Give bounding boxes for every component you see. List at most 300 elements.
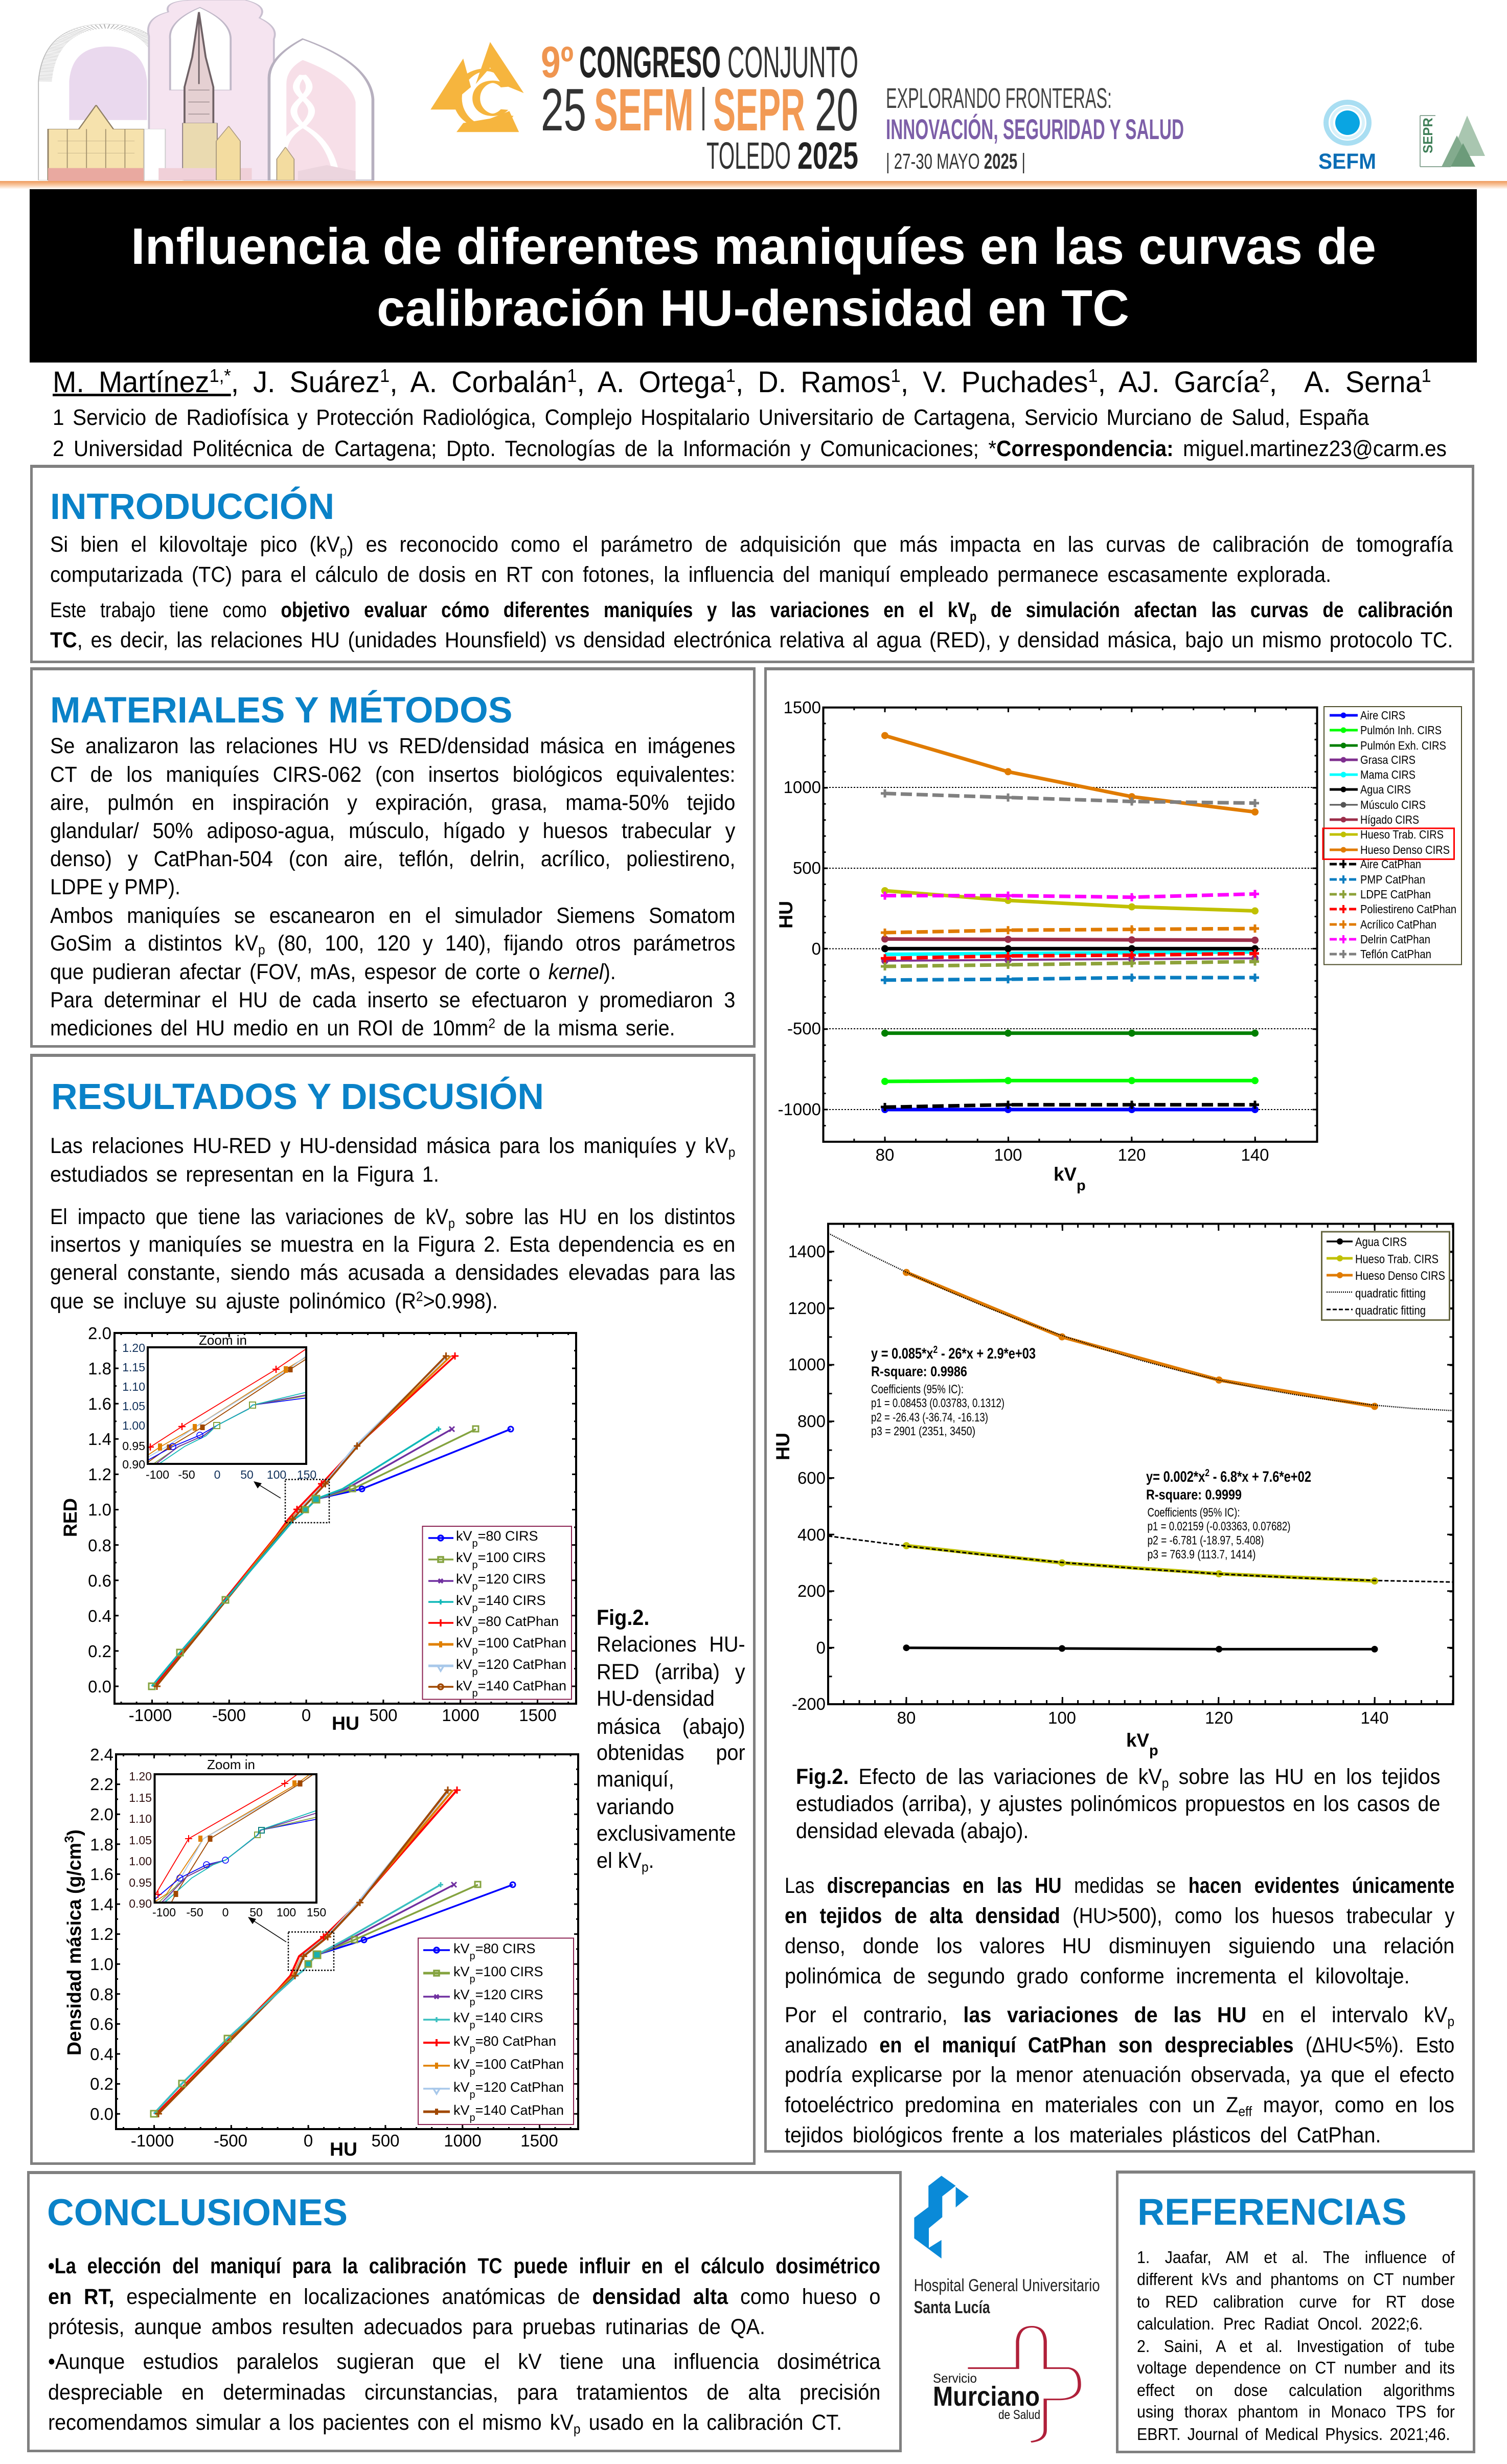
- text block: referencias: to RED calibration curve for RT dose: [1137, 2292, 1455, 2311]
- text block: resultados: Las relaciones HU-RED y HU-densidad másica para los maniquíes y kVp: [50, 1134, 735, 1160]
- axis labels: kV: [1054, 1164, 1077, 1185]
- panel: materiales y métodos: [30, 667, 756, 1048]
- tick labels: 0.8: [90, 1985, 113, 2004]
- legend: p: [470, 2112, 475, 2123]
- heading: materiales y métodos: MATERIALES Y MÉTODOS: [50, 690, 512, 731]
- title: [30, 189, 1477, 363]
- legend: inserts: Aire CatPhan: [1360, 857, 1421, 871]
- text block: conclusiones: en RT, especialmente en localizaciones anatómicas de densidad alta como hueso o: [48, 2285, 880, 2309]
- legend: p: [470, 2089, 475, 2100]
- zoom selection box and arrow: [254, 1480, 329, 1523]
- text block: conclusiones: prótesis, aunque ambos resulten adecuados para pruebas rutinarias de QA.: [48, 2315, 765, 2339]
- inset: zoom in: -100: [146, 1468, 169, 1481]
- annotation: trabecular bone fit: p3 = 763.9 (113.7, 1414): [1147, 1548, 1255, 1562]
- chart: RED vs HU: 1500: [519, 1706, 557, 1725]
- legend: kV: [453, 2010, 470, 2025]
- icon: Hospital Santa Lucía mark: [914, 2176, 969, 2258]
- tick labels: 0.8: [88, 1536, 111, 1555]
- caption: Fig.2 right: estudiados (arriba), y ajustes polinómicos propuestos en los casos de: [796, 1792, 1440, 1816]
- inset: zoom in: 0.95: [122, 1439, 145, 1453]
- icon: Servicio Murciano de Salud cross: [968, 2327, 1080, 2442]
- legend: fits: [1322, 1232, 1450, 1320]
- text block: discussion: polinómica de segundo grado conforme incrementa el kilovoltaje.: [785, 1964, 1410, 1988]
- legend: inserts: LDPE CatPhan: [1360, 888, 1431, 901]
- legend: p: [470, 1997, 475, 2008]
- legend: kV: [453, 2079, 470, 2095]
- legend: fits: quadratic fitting: [1355, 1304, 1426, 1318]
- tick labels: 0: [812, 939, 821, 958]
- text block: resultados: El impacto que tiene las variaciones de kVp sobre las HU en los distintos: [50, 1205, 735, 1231]
- tick labels: 600: [797, 1468, 826, 1487]
- legend: kV: [456, 1528, 472, 1544]
- congress title text: SEPR: [713, 76, 805, 143]
- text block: discussion: tejidos biológicos frente a los materiales plásticos del CatPhan.: [785, 2123, 1381, 2147]
- chart: RED vs HU: [60, 1324, 577, 1734]
- text block: referencias: 1. Jaafar, AM et al. The influence of: [1137, 2248, 1455, 2267]
- chart: quadratic fits: 80: [897, 1708, 916, 1727]
- axis labels: [60, 1498, 359, 1734]
- caption: Fig.2 left: Fig.2.: [597, 1606, 649, 1630]
- text block: materiales y métodos: CT de los maniquíes CIRS-062 (con insertos biológicos equivalentes:: [50, 762, 735, 787]
- tick labels: [778, 698, 821, 1119]
- tick labels: 0: [816, 1638, 826, 1657]
- congress title text: 25: [541, 76, 586, 143]
- chart: RED vs HU: -500: [212, 1706, 246, 1725]
- legend: inserts: Agua CIRS: [1360, 783, 1411, 796]
- chart: HU vs kVp by insert: 100: [994, 1145, 1022, 1164]
- legend: inserts: Delrin CatPhan: [1360, 933, 1430, 946]
- annotation: dense bone fit: p2 = -26.43 (-36.74, -16.13): [871, 1411, 988, 1425]
- series: water: [906, 1648, 1375, 1649]
- inset: zoom in: 0.95: [129, 1876, 152, 1889]
- health service name: de Salud: [998, 2408, 1040, 2422]
- axis labels: [772, 1433, 1158, 1759]
- health service name: Servicio: [933, 2371, 977, 2386]
- tick labels: 1000: [784, 778, 821, 797]
- legend: inserts: Aire CIRS: [1360, 709, 1405, 722]
- text block: materiales y métodos: aire, pulmón en inspiración y expiración, grasa, mama-50% tejido: [50, 790, 735, 815]
- inset: zoom in: -50: [186, 1906, 203, 1919]
- legend: =80 CIRS: [478, 1528, 538, 1544]
- tick labels: [88, 1324, 111, 1696]
- legend: =140 CIRS: [475, 2010, 543, 2025]
- text block: referencias: 2. Saini, A et al. Investigation of tube: [1137, 2337, 1455, 2356]
- legend: inserts: Pulmón Inh. CIRS: [1360, 724, 1442, 737]
- inset: zoom in: [122, 1332, 316, 1481]
- title: calibración HU-densidad en TC: [377, 280, 1129, 337]
- decorative band: [0, 181, 1507, 189]
- congress title text: 20: [815, 76, 858, 143]
- caption: Fig.2 left: variando: [597, 1795, 674, 1819]
- congress slogan: [886, 82, 1184, 174]
- legend: kV: [456, 1571, 472, 1587]
- tick labels: 2.0: [90, 1805, 113, 1824]
- axis labels: p: [1149, 1743, 1158, 1759]
- icon: congress logo triangle: [430, 42, 524, 132]
- text block: introducción: TC, es decir, las relaciones HU (unidades Hounsfield) vs densidad electrónica relativa al agua (RED), y densidad másica, bajo un mismo protocolo TC.: [50, 628, 1453, 652]
- axis labels: Densidad másica (g/cm: [64, 1840, 85, 2055]
- chart: quadratic fits: [772, 1223, 1454, 1759]
- legend: fits: quadratic fitting: [1355, 1286, 1426, 1301]
- congress slogan: EXPLORANDO FRONTERAS:: [886, 82, 1112, 114]
- annotation: trabecular bone fit: y= 0.002*x: [1146, 1468, 1221, 1485]
- inset: zoom in: 0: [222, 1906, 229, 1919]
- legend: kV: [456, 1550, 472, 1565]
- annotation: dense bone fit: p3 = 2901 (2351, 3450): [871, 1425, 975, 1438]
- tick labels: 0.4: [88, 1607, 111, 1625]
- text block: discussion: Las discrepancias en las HU medidas se hacen evidentes únicamente: [785, 1873, 1454, 1898]
- illustration: Toledo monuments: [38, 0, 373, 182]
- tick labels: 2.2: [90, 1775, 113, 1794]
- inset: zoom in: [129, 1757, 326, 1919]
- header banner: congress logos: [0, 0, 1507, 189]
- tick labels: 0.2: [88, 1642, 111, 1661]
- tick labels: 1.0: [90, 1955, 113, 1974]
- inset: zoom in: -50: [178, 1468, 195, 1481]
- congress title text: 9º: [541, 38, 574, 87]
- legend: inserts: Hígado CIRS: [1360, 813, 1419, 826]
- inset: zoom in: 100: [267, 1468, 286, 1481]
- caption: Fig.2 left: HU-densidad: [597, 1686, 715, 1711]
- curves: CatPhan: [154, 1356, 455, 1686]
- inset: zoom in: 100: [277, 1906, 296, 1919]
- tick labels: 1.8: [88, 1359, 111, 1378]
- legend: kV: [456, 1678, 472, 1693]
- y axis ticks: [115, 1332, 576, 1704]
- health service name: Murciano: [933, 2381, 1040, 2412]
- text block: discussion: podría explicarse por la menor atenuación observada, ya que el efecto: [785, 2063, 1454, 2087]
- legend: fits: Hueso Trab. CIRS: [1355, 1253, 1438, 1266]
- caption: Fig.2 right: [796, 1765, 1440, 1844]
- legend: p: [472, 1538, 478, 1549]
- legend: =120 CIRS: [478, 1571, 545, 1587]
- legend: [418, 1938, 574, 2124]
- caption: Fig.2 left: RED (arriba) y: [597, 1660, 745, 1684]
- affiliation 2 and correspondence: 2 Universidad Politécnica de Cartagena; Dpto. Tecnologías de la Información y Comunicaciones; *Correspondencia: miguel.martinez23@carm.es: [53, 436, 1447, 461]
- chart: RED vs HU: -1000: [129, 1706, 172, 1725]
- series: dense bone with fit: [828, 1233, 1453, 1411]
- inset: zoom in: 1.00: [122, 1419, 145, 1432]
- logo: SEFM: [1318, 102, 1376, 174]
- legend: =100 CatPhan: [475, 2056, 564, 2072]
- legend: p: [470, 1974, 475, 1985]
- legend: p: [472, 1581, 478, 1592]
- legend: fits: Hueso Denso CIRS: [1355, 1269, 1445, 1283]
- congress slogan: INNOVACIÓN, SEGURIDAD Y SALUD: [886, 113, 1184, 145]
- axes and ticks: [823, 707, 1317, 1142]
- markers: [149, 1352, 513, 1690]
- chart: HU vs kVp by insert: [775, 698, 1462, 1194]
- text block: discussion: en tejidos de alta densidad (HU>500), como los huesos trabecular y: [785, 1904, 1454, 1928]
- hospital name: Santa Lucía: [914, 2298, 990, 2317]
- annotation: trabecular bone fit: - 6.8*x + 7.6*e+02: [1209, 1468, 1311, 1485]
- tick labels: 1.6: [90, 1865, 113, 1884]
- congress title text: CONGRESO: [579, 38, 721, 87]
- text block: referencias: calculation. Prec Radiat Oncol. 2022;6.: [1137, 2314, 1423, 2333]
- legend: p: [472, 1645, 478, 1656]
- tick labels: 400: [797, 1525, 826, 1544]
- legend: kV: [456, 1657, 472, 1672]
- caption: Fig.2 left: Relaciones HU-: [597, 1632, 745, 1657]
- text block: introducción: Si bien el kilovoltaje pico (kVp) es reconocido como el parámetro de adquisición que más impacta en las curvas de calibración de tomografía: [50, 532, 1453, 558]
- chart: quadratic fits: 120: [1205, 1708, 1233, 1727]
- logo: SEPR: SEPR: [1420, 118, 1435, 153]
- text block: referencias: using thorax phantom in Monaco TPS for: [1137, 2402, 1455, 2421]
- legend: kV: [456, 1593, 472, 1608]
- legend: inserts: Teflón CatPhan: [1360, 947, 1431, 961]
- text block: materiales y métodos: GoSim a distintos kVp (80, 100, 120 y 140), fijando otros parámetros: [50, 931, 735, 957]
- text block: materiales y métodos: Ambos maniquíes se escanearon en el simulador Siemens Somatom: [50, 903, 735, 928]
- inset: zoom in: 1.00: [129, 1855, 152, 1868]
- text block: referencias: voltage dependence on CT number and its: [1137, 2358, 1455, 2377]
- legend: inserts: Acrílico CatPhan: [1360, 918, 1436, 931]
- text block: materiales y métodos: LDPE y PMP).: [50, 875, 180, 899]
- chart: density vs HU: [62, 1746, 579, 2160]
- chart: density vs HU: 500: [371, 2131, 400, 2150]
- panel: referencias: [1116, 2171, 1475, 2453]
- curves: CatPhan: [156, 1790, 457, 2114]
- affiliation 1: 1 Servicio de Radiofísica y Protección Radiológica, Complejo Hospitalario Universitario de Cartagena, Servicio Murciano de Salud, España: [53, 405, 1369, 430]
- text block: conclusiones: recomendamos simular a los pacientes con el mismo kVp usado en la calibración CT.: [48, 2410, 842, 2436]
- legend: =120 CatPhan: [475, 2079, 564, 2095]
- legend: fits: Agua CIRS: [1355, 1235, 1407, 1249]
- chart: density vs HU: 1500: [520, 2131, 558, 2150]
- tick labels: 1000: [788, 1355, 826, 1374]
- caption: Fig.2 left: [597, 1606, 745, 1874]
- inset: zoom in: -100: [152, 1906, 176, 1919]
- series: CIRS inserts: [885, 736, 1255, 1110]
- chart: HU vs kVp by insert: 120: [1117, 1145, 1146, 1164]
- inset: zoom in: 1.05: [122, 1399, 145, 1413]
- text block: introducción: computarizada (TC) para el cálculo de dosis en RT con fotones, la influencia del maniquí empleado permanece escasamente explorada.: [50, 562, 1331, 587]
- tick labels: 1.2: [90, 1925, 113, 1943]
- text block: materiales y métodos: que pudieran afectar (FOV, mAs, espesor de corte o kernel).: [50, 960, 616, 984]
- legend: inserts: Hueso Denso CIRS: [1360, 843, 1450, 856]
- panel: conclusiones: [27, 2171, 902, 2452]
- tick labels: 1.4: [90, 1895, 113, 1914]
- annotation: dense bone fit: y = 0.085*x: [871, 1345, 950, 1362]
- heading: referencias: REFERENCIAS: [1137, 2190, 1407, 2233]
- chart: density vs HU: 1000: [444, 2131, 482, 2150]
- tick labels: 1.2: [88, 1465, 111, 1484]
- logo: SEPR: [1420, 116, 1485, 167]
- legend: =100 CIRS: [478, 1550, 545, 1565]
- caption: Fig.2 left: másica (abajo): [597, 1714, 745, 1739]
- caption: Fig.2 left: maniquí,: [597, 1767, 674, 1792]
- annotation: dense bone fit: R-square: 0.9986: [871, 1364, 967, 1380]
- chart: RED vs HU: 1000: [442, 1706, 480, 1725]
- text block: discussion: fotoeléctrico predomina en materiales con un Zeff mayor, como en los: [785, 2093, 1454, 2119]
- congress title text: CONJUNTO: [727, 38, 858, 87]
- text block: resultados: que se incluye su ajuste polinómico (R2>0.998).: [50, 1288, 498, 1314]
- axis labels: RED: [60, 1498, 81, 1537]
- legend: p: [472, 1623, 478, 1635]
- legend: p: [470, 2043, 475, 2054]
- inset: zoom in: 150: [297, 1468, 316, 1481]
- text block: discussion: [785, 1873, 1454, 2149]
- legend: kV: [453, 2103, 470, 2118]
- grid lines: [823, 787, 1317, 1110]
- congress slogan: | 27-30 MAYO 2025 |: [886, 149, 1025, 174]
- congress title text: 2025: [797, 134, 858, 177]
- inset: zoom in: 1.10: [129, 1812, 152, 1825]
- tick labels: 2.0: [88, 1324, 111, 1343]
- chart: HU vs kVp by insert: 80: [876, 1145, 894, 1164]
- hospital name: [914, 2276, 1100, 2317]
- congress title text: TOLEDO: [706, 134, 791, 177]
- inset: zoom in: 0: [214, 1468, 220, 1481]
- zoom selection box and arrow: [248, 1917, 334, 1971]
- text block: conclusiones: [48, 2254, 880, 2436]
- axis labels: ): [64, 1829, 85, 1836]
- annotation: trabecular bone fit: Coefficients (95% IC):: [1147, 1506, 1240, 1520]
- tick labels: 1200: [788, 1299, 826, 1318]
- inset: zoom in: 0.90: [129, 1897, 152, 1910]
- text block: introducción: [50, 532, 1453, 652]
- inset: zoom in: Zoom in: [207, 1757, 255, 1772]
- tick labels: 1.6: [88, 1394, 111, 1413]
- axis labels: HU: [330, 2139, 357, 2160]
- tick labels: 0.0: [88, 1677, 111, 1696]
- legend: inserts: Músculo CIRS: [1360, 798, 1426, 811]
- legend: inserts: Poliestireno CatPhan: [1360, 902, 1456, 916]
- tick labels: 0.4: [90, 2045, 113, 2064]
- legend: =80 CatPhan: [475, 2033, 556, 2049]
- caption: Fig.2 right: Fig.2. Efecto de las variaciones de kVp sobre las HU en los tejidos: [796, 1765, 1440, 1791]
- text block: resultados: estudiados se representan en la Figura 1.: [50, 1162, 439, 1187]
- axis labels: [62, 1829, 357, 2160]
- annotation: trabecular bone fit: p1 = 0.02159 (-0.03363, 0.07682): [1147, 1520, 1290, 1533]
- legend: kV: [453, 1964, 470, 1979]
- chart: density vs HU: -1000: [131, 2131, 174, 2150]
- congress title text: SEFM: [594, 76, 694, 143]
- tick labels: 200: [797, 1581, 826, 1600]
- legend: p: [470, 2020, 475, 2031]
- inset: zoom in: 50: [240, 1468, 254, 1481]
- text block: introducción: Este trabajo tiene como objetivo evaluar cómo diferentes maniquíes y las variaciones en el kVp de simulación afectan las curvas de calibración: [50, 598, 1453, 624]
- text block: resultados: general constante, siendo más acusada a densidades elevadas para las: [50, 1260, 735, 1285]
- chart: RED vs HU: 0: [302, 1706, 311, 1725]
- inset: zoom in: 1.15: [122, 1361, 145, 1374]
- text block: materiales y métodos: Para determinar el HU de cada inserto se efectuaron y promediaron 3: [50, 988, 735, 1012]
- annotation: dense bone fit: Coefficients (95% IC):: [871, 1383, 964, 1396]
- panel: introducción: [30, 465, 1474, 663]
- tick labels: 1500: [784, 698, 821, 717]
- panel: resultados y discusión: [30, 1054, 756, 2165]
- annotation: trabecular bone fit: [1146, 1467, 1311, 1562]
- text block: materiales y métodos: mediciones del HU medio en un ROI de 10mm2 de la misma serie.: [50, 1015, 675, 1041]
- tick labels: 0.2: [90, 2074, 113, 2093]
- axis labels: HU: [775, 901, 796, 929]
- text block: discussion: Por el contrario, las variaciones de las HU en el intervalo kVp: [785, 2003, 1454, 2029]
- text block: resultados: insertos y maniquíes se muestra en la Figura 2. Esta dependencia es en: [50, 1232, 735, 1257]
- chart: density vs HU: -500: [214, 2131, 247, 2150]
- logos: hospital and health service: [905, 2171, 1114, 2457]
- authors: M. Martínez1,*, J. Suárez1, A. Corbalán1, A. Ortega1, D. Ramos1, V. Puchades1, AJ. García2, A. Serna1: [53, 365, 1431, 399]
- legend: kV: [453, 2033, 470, 2049]
- inset: zoom in: 0.90: [122, 1458, 145, 1471]
- caption: Fig.2 left: exclusivamente: [597, 1821, 736, 1846]
- annotation: trabecular bone fit: R-square: 0.9999: [1146, 1487, 1242, 1503]
- axis labels: 3: [62, 1836, 77, 1843]
- heading: resultados y discusión: RESULTADOS Y DISCUSIÓN: [51, 1076, 544, 1117]
- legend: =120 CIRS: [475, 1987, 543, 2002]
- text block: referencias: [1137, 2245, 1455, 2447]
- axis labels: [775, 901, 1086, 1194]
- chart: density vs HU: 0: [304, 2131, 313, 2150]
- tick labels: -500: [787, 1019, 821, 1038]
- inset: zoom in: Zoom in: [199, 1332, 247, 1348]
- legend: =80 CIRS: [475, 1941, 535, 1956]
- legend: kV: [456, 1614, 472, 1629]
- heading: conclusiones: CONCLUSIONES: [47, 2192, 348, 2233]
- tick labels: 0.0: [90, 2105, 113, 2123]
- text block: materiales y métodos: glandular/ 50% adiposo-agua, músculo, hígado y huesos trabecular y: [50, 819, 735, 843]
- tick labels: 800: [797, 1412, 826, 1431]
- tick labels: 0.6: [90, 2015, 113, 2033]
- tick labels: -200: [792, 1694, 826, 1713]
- text block: conclusiones: •La elección del maniquí para la calibración TC puede influir en el cálculo dosimétrico: [48, 2254, 880, 2278]
- legend: inserts: PMP CatPhan: [1360, 873, 1425, 886]
- legend: p: [472, 1688, 478, 1699]
- logo: SEFM: SEFM: [1318, 149, 1376, 174]
- annotation: dense bone fit: [871, 1344, 1036, 1438]
- panel: figures and discussion (right column): [764, 667, 1475, 2153]
- text block: conclusiones: •Aunque estudios paralelos sugieran que el kV tiene una influencia dosimétrica: [48, 2349, 880, 2374]
- tick labels: 1400: [788, 1242, 826, 1261]
- text block: discussion: analizado en el maniquí CatPhan son despreciables (ΔHU<5%). Esto: [785, 2033, 1454, 2058]
- tick labels: -1000: [778, 1100, 821, 1119]
- axis labels: HU: [332, 1713, 359, 1734]
- title: Influencia de diferentes maniquíes en las curvas de: [131, 218, 1376, 275]
- inset: zoom in: 1.10: [122, 1380, 145, 1393]
- legend: =100 CIRS: [475, 1964, 543, 1979]
- axes and ticks: [116, 1754, 578, 2129]
- text block: discussion: denso, donde los valores HU disminuyen siguiendo una relación: [785, 1934, 1454, 1958]
- legend: p: [470, 1951, 475, 1962]
- inset: zoom in: 1.05: [129, 1834, 152, 1847]
- legend: =140 CatPhan: [475, 2103, 564, 2118]
- legend: inserts: [1323, 707, 1462, 964]
- legend: kV: [453, 2056, 470, 2072]
- text block: resultados: [50, 1134, 735, 1314]
- legend: =140 CatPhan: [478, 1678, 566, 1693]
- annotation: dense bone fit: - 26*x + 2.9*e+03: [938, 1345, 1036, 1362]
- congress title text: [541, 38, 858, 177]
- axis labels: p: [1077, 1178, 1086, 1194]
- annotation: trabecular bone fit: p2 = -6.781 (-18.97, 5.408): [1147, 1534, 1264, 1547]
- legend: =120 CatPhan: [478, 1657, 566, 1672]
- legend: inserts: Pulmón Exh. CIRS: [1360, 739, 1446, 752]
- annotation: trabecular bone fit: 2: [1205, 1467, 1209, 1479]
- inset: zoom in: 150: [307, 1906, 326, 1919]
- legend: inserts: Grasa CIRS: [1360, 753, 1415, 766]
- legend: kV: [456, 1635, 472, 1651]
- tick labels: 1.8: [90, 1835, 113, 1854]
- axes and ticks: [828, 1223, 1453, 1704]
- chart: quadratic fits: 140: [1360, 1708, 1389, 1727]
- tick labels: 500: [793, 858, 821, 877]
- tick labels: 1.4: [88, 1430, 111, 1449]
- heading: introducción: INTRODUCCIÓN: [50, 486, 334, 527]
- curves: CIRS: [152, 1429, 511, 1686]
- series: trabecular bone with fit: [828, 1536, 1453, 1582]
- inset: zoom in: 1.20: [122, 1341, 145, 1354]
- curves: CIRS: [154, 1885, 513, 2114]
- text block: materiales y métodos: [50, 734, 735, 1041]
- annotation: dense bone fit: p1 = 0.08453 (0.03783, 0.1312): [871, 1396, 1004, 1410]
- axis labels: HU: [772, 1433, 793, 1460]
